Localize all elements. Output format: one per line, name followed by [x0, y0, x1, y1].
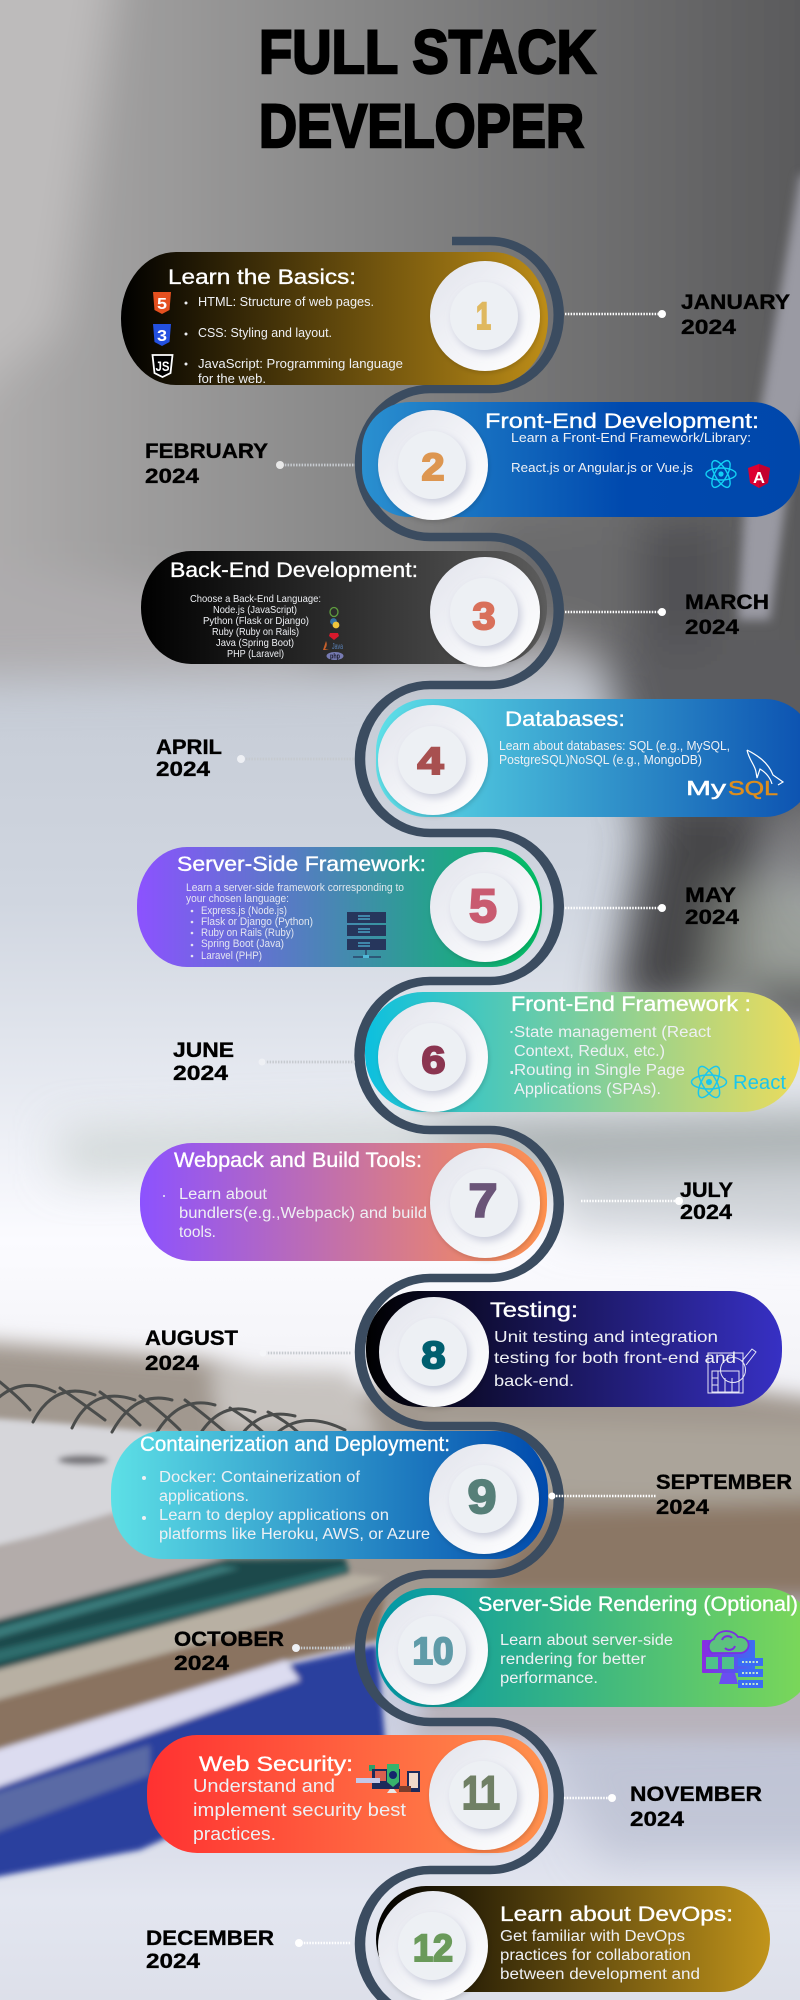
body text: practices.: [193, 1824, 276, 1844]
body text: Learn a server-side framework corresponding to: [186, 882, 404, 894]
body text: [500, 1928, 700, 1983]
number disc 8: [379, 1297, 489, 1407]
body text: practices for collaboration: [500, 1947, 691, 1964]
icon: python: [330, 618, 339, 628]
body text: rendering for better: [500, 1651, 646, 1668]
body text: [500, 1632, 673, 1687]
number disc 1: 1: [476, 296, 491, 338]
date: March 2024: 2024: [685, 615, 739, 639]
date: September 2024: [548, 1470, 792, 1519]
number disc 8: 8: [422, 1335, 446, 1377]
body text: applications.: [159, 1488, 249, 1505]
body text: Ruby (Ruby on Rails): [212, 626, 299, 638]
body text: Python (Flask or Django): [203, 615, 309, 627]
body text: Routing in Single Page: [514, 1062, 685, 1079]
date: March 2024: MARCH: [685, 590, 769, 614]
icon: javascript: JS: [156, 358, 170, 374]
body text: Choose a Back-End Language:: [190, 593, 321, 605]
body text: back-end.: [494, 1373, 574, 1390]
number disc 1: [430, 261, 540, 371]
number disc 7: [430, 1148, 540, 1258]
notebook spiral: [0, 1382, 345, 1434]
number disc 7: 7: [468, 1174, 498, 1227]
logo: mysql: [686, 778, 778, 800]
title: [259, 18, 596, 160]
panel: step 3 back-end development: [141, 551, 547, 664]
panel: step 6 front-end framework: [365, 992, 800, 1112]
icon: php: [326, 652, 344, 660]
body text: Understand and: [193, 1776, 335, 1796]
icon: html5: [153, 292, 171, 314]
icon: mysql dolphin: [747, 750, 783, 785]
icon: react logo: [692, 1063, 786, 1101]
body text: bundlers(e.g.,Webpack) and build: [179, 1205, 427, 1222]
body text: [494, 1329, 736, 1390]
date: November 2024: NOVEMBER: [630, 1782, 763, 1806]
heading: Learn the Basics:: [168, 266, 356, 289]
heading: Back-End Development:: [170, 559, 418, 582]
icon: java: Java: [332, 642, 343, 651]
icon: ruby: [329, 633, 339, 640]
date: April 2024: APRIL: [156, 735, 222, 759]
number disc 9: 9: [468, 1470, 496, 1523]
panel: step 1 learn the basics: [121, 252, 548, 386]
body text: tools.: [179, 1224, 216, 1241]
list: CSS: Styling and layout.: [198, 325, 332, 340]
date: October 2024: 2024: [174, 1651, 229, 1675]
date: May 2024: 2024: [685, 905, 739, 929]
body text: Java (Spring Boot): [216, 637, 294, 649]
number disc 3: [430, 557, 540, 667]
body text: Ruby on Rails (Ruby): [201, 927, 294, 939]
icon: css3: [153, 324, 171, 346]
number disc 9: [429, 1444, 539, 1554]
number disc 3: 3: [472, 596, 496, 638]
heading: Web Security:: [199, 1753, 353, 1776]
heading: Containerization and Deployment:: [140, 1433, 450, 1456]
body text: platforms like Heroku, AWS, or Azure: [159, 1526, 430, 1543]
list: HTML: Structure of web pages.: [198, 294, 374, 309]
date: December 2024: DECEMBER: [146, 1926, 274, 1950]
icon: css3: 3: [157, 328, 167, 345]
date: October 2024: [174, 1627, 351, 1675]
body text: implement security best: [193, 1800, 406, 1820]
date: May 2024: [565, 883, 739, 929]
date: April 2024: 2024: [156, 757, 210, 781]
number disc 5: [430, 852, 540, 962]
panel: step 2 front-end development: [362, 402, 800, 517]
panel: step 10 server-side rendering: [376, 1588, 800, 1707]
date: September 2024: SEPTEMBER: [656, 1470, 792, 1494]
icon: server rack: [347, 912, 386, 958]
number disc 12: [378, 1891, 488, 2000]
body text: Learn about server-side: [500, 1632, 673, 1649]
date: April 2024: [156, 735, 355, 781]
body text: Express.js (Node.js): [201, 905, 287, 917]
heading: Databases:: [505, 708, 625, 731]
title: DEVELOPER: [259, 92, 584, 160]
body text: Learn a Front-End Framework/Library:: [511, 430, 751, 445]
icon: cloud server: [702, 1631, 763, 1688]
heading: Front-End Framework :: [511, 993, 751, 1016]
icon: php: php: [330, 654, 340, 660]
body text: Learn about: [179, 1186, 268, 1203]
icon: react: [706, 458, 736, 490]
date: January 2024: 2024: [681, 315, 736, 339]
body text: Laravel (PHP): [201, 950, 262, 962]
body text: [193, 1776, 406, 1844]
date: November 2024: 2024: [630, 1807, 684, 1831]
panel: step 12 learn about devops: [376, 1886, 770, 1992]
date: February 2024: [145, 439, 355, 488]
heading: Front-End Development:: [485, 410, 759, 433]
body text: between development and: [500, 1966, 700, 1983]
date: October 2024: OCTOBER: [174, 1627, 284, 1651]
icon: java: [323, 641, 343, 651]
body text: Unit testing and integration: [494, 1329, 718, 1346]
body text: React.js or Angular.js or Vue.js: [511, 460, 693, 475]
date: February 2024: FEBRUARY: [145, 439, 268, 463]
panel: step 11 web security: [147, 1735, 548, 1853]
date: July 2024: JULY: [680, 1178, 733, 1202]
body text: Spring Boot (Java): [201, 938, 284, 950]
date: June 2024: 2024: [173, 1061, 228, 1085]
icon: node.js: [330, 608, 338, 616]
heading: Server-Side Rendering (Optional): [478, 1593, 798, 1616]
icon: react logo: React: [733, 1072, 786, 1094]
panel: step 8 testing: [366, 1291, 782, 1407]
body text: your chosen language:: [186, 893, 289, 905]
date: August 2024: AUGUST: [145, 1326, 238, 1350]
heading: Learn about DevOps:: [500, 1903, 733, 1926]
number disc 4: 4: [418, 741, 444, 783]
body text: [499, 738, 730, 767]
logo: mysql: My: [686, 778, 726, 800]
body text: [510, 1024, 712, 1098]
date: December 2024: [146, 1926, 351, 1973]
icon: html5: 5: [157, 296, 167, 313]
list: for the web.: [198, 371, 266, 386]
number disc 11: 11: [462, 1766, 500, 1819]
icon: test report with magnifier: [708, 1349, 756, 1393]
date: June 2024: JUNE: [173, 1038, 234, 1062]
body text: Node.js (JavaScript): [213, 604, 297, 616]
body text: [190, 593, 321, 660]
body text: Docker: Containerization of: [159, 1469, 361, 1486]
body text: Context, Redux, etc.): [514, 1043, 665, 1060]
body text: [163, 1186, 427, 1241]
title: FULL STACK: [259, 18, 596, 86]
body text: PHP (Laravel): [227, 648, 284, 660]
body text: Flask or Django (Python): [201, 916, 313, 928]
heading: Testing:: [490, 1299, 578, 1322]
logo: mysql: SQL: [728, 778, 778, 800]
icon: javascript: [152, 355, 172, 377]
panel: step 9 containerization and deployment: [111, 1431, 548, 1559]
icon: security devices: [356, 1764, 420, 1793]
date: May 2024: MAY: [685, 883, 736, 907]
list: [184, 294, 403, 386]
date: September 2024: 2024: [656, 1495, 709, 1519]
date: June 2024: [173, 1038, 355, 1085]
body text: Applications (SPAs).: [514, 1081, 661, 1098]
date: August 2024: 2024: [145, 1351, 199, 1375]
body text: Get familiar with DevOps: [500, 1928, 685, 1945]
number disc 10: [378, 1595, 488, 1705]
date: March 2024: [565, 590, 769, 639]
body text: PostgreSQL)NoSQL (e.g., MongoDB): [499, 752, 702, 767]
body text: [186, 882, 404, 962]
body text: [511, 430, 751, 475]
icon: angular: A: [753, 470, 765, 487]
heading: Webpack and Build Tools:: [174, 1149, 422, 1172]
panel: step 7 webpack and build tools: [140, 1143, 547, 1261]
number disc 10: 10: [412, 1631, 454, 1673]
date: January 2024: [565, 290, 790, 339]
number disc 4: [378, 705, 488, 815]
body text: Learn about databases: SQL (e.g., MySQL,: [499, 738, 730, 753]
date: February 2024: 2024: [145, 464, 199, 488]
number disc 12: 12: [413, 1928, 453, 1970]
number disc 6: 6: [422, 1040, 446, 1082]
winding road connecting the steps: [360, 241, 559, 2000]
body text: Learn to deploy applications on: [159, 1507, 389, 1524]
date: November 2024: [564, 1782, 763, 1831]
number disc 2: 2: [422, 447, 444, 489]
body text: [142, 1469, 430, 1543]
date: December 2024: 2024: [146, 1949, 200, 1973]
number disc 6: [378, 1002, 488, 1112]
body text: performance.: [500, 1670, 598, 1687]
number disc 2: [378, 410, 488, 520]
date: July 2024: 2024: [680, 1200, 732, 1224]
heading: Server-Side Framework:: [177, 853, 426, 876]
body text: testing for both front-end and: [494, 1350, 736, 1367]
panel: step 4 databases: [376, 699, 800, 817]
number disc 11: [429, 1740, 539, 1850]
date: July 2024: [581, 1178, 733, 1224]
body text: State management (React: [514, 1024, 712, 1041]
icon: angular: [748, 464, 770, 488]
panel: step 5 server-side framework: [137, 847, 542, 967]
date: January 2024: JANUARY: [681, 290, 790, 314]
date: August 2024: [145, 1326, 351, 1375]
list: JavaScript: Programming language: [198, 356, 403, 371]
number disc 5: 5: [469, 879, 497, 932]
